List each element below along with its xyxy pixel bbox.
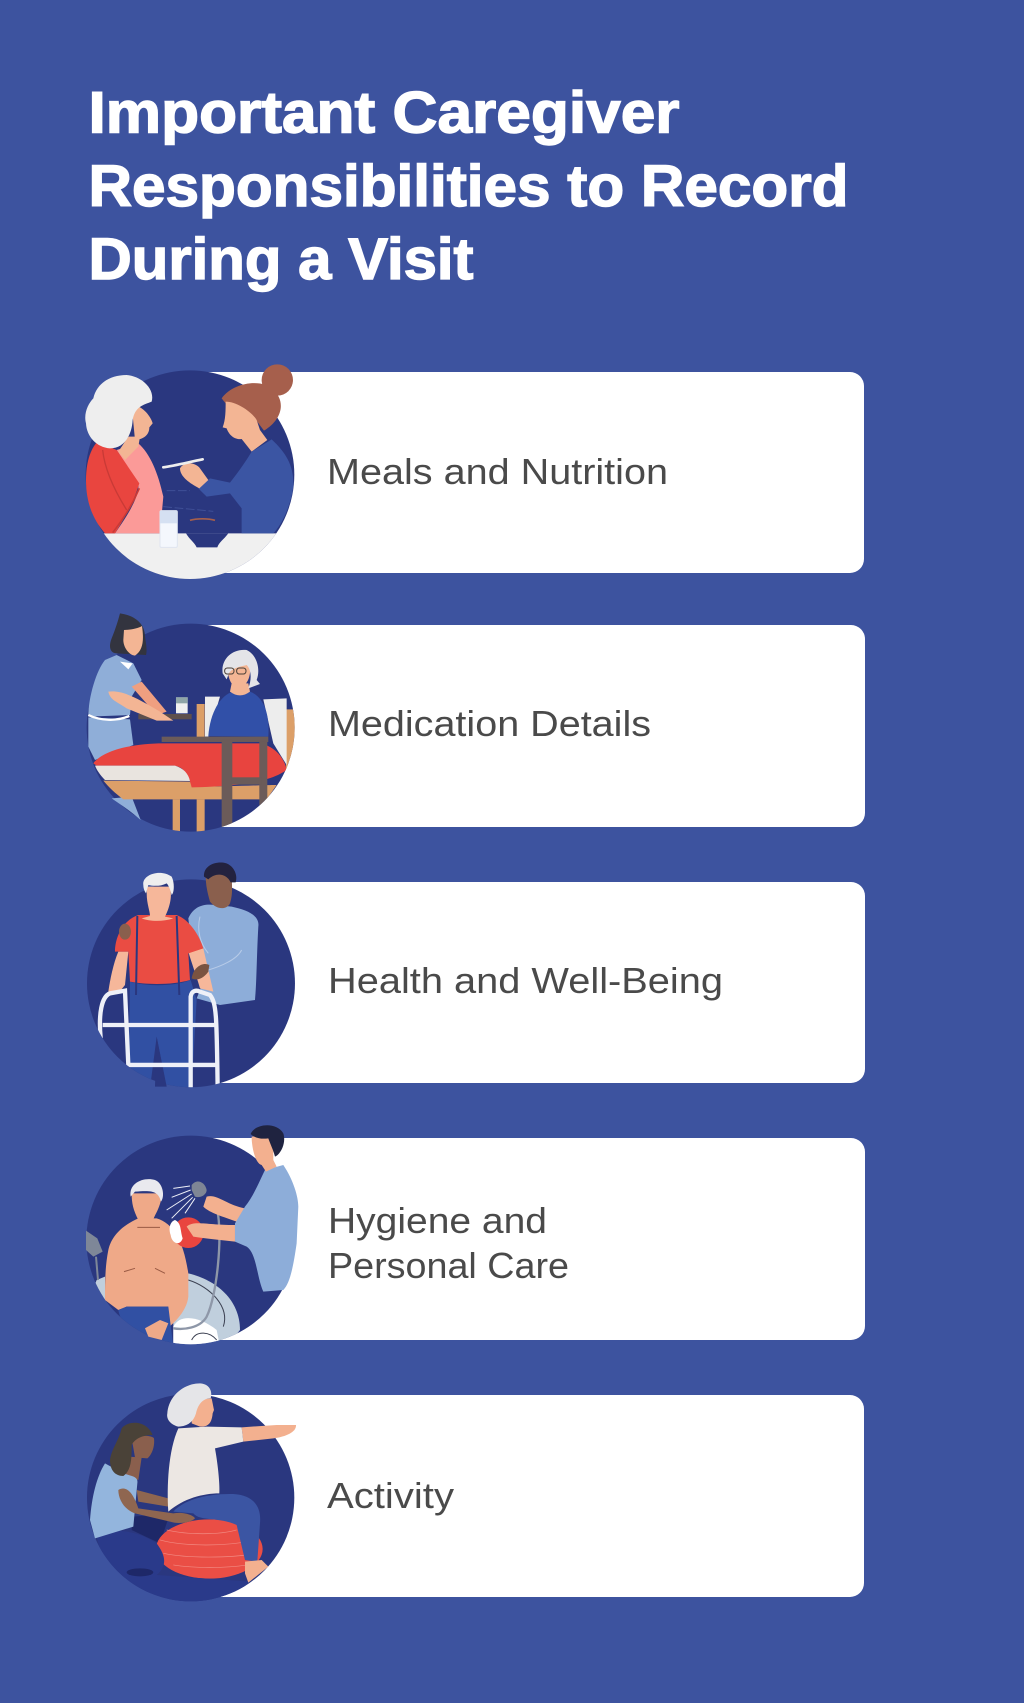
label: meals and nutrition: Meals and Nutrition	[327, 451, 668, 492]
title	[88, 80, 848, 292]
label: medication details: Medication Details	[328, 703, 651, 744]
card: health	[190, 882, 865, 1083]
label: hygiene and personal care: Personal Care	[328, 1245, 569, 1286]
card: activity	[190, 1395, 864, 1597]
icon: caregiver feeding elderly woman	[80, 364, 300, 583]
icon: caregiver bathing man	[86, 1125, 298, 1347]
label: hygiene and personal care	[328, 1200, 569, 1286]
icon: therapist helping woman on exercise ball	[87, 1383, 296, 1603]
infographic canvas	[85, 89, 865, 1602]
icon: caregiver helping man with walker	[87, 863, 295, 1088]
title: During a Visit	[88, 227, 474, 292]
panel: hygiene and personal care	[86, 1125, 865, 1347]
title: Responsibilities to Record	[88, 154, 848, 219]
label: hygiene and personal care: Hygiene and	[328, 1200, 547, 1241]
panel: activity	[87, 1383, 864, 1603]
panel: health and well-being	[87, 863, 865, 1088]
title: Important Caregiver	[88, 80, 680, 146]
label: activity: Activity	[327, 1475, 454, 1516]
panel: medication details	[87, 613, 865, 833]
card: hygiene	[190, 1138, 865, 1340]
card: meals	[190, 372, 864, 573]
panel: meals and nutrition	[80, 364, 864, 583]
icon: nurse bringing medication to patient in bed	[87, 613, 297, 833]
card: medication	[190, 625, 865, 827]
label: health and well-being: Health and Well-Being	[328, 960, 723, 1001]
